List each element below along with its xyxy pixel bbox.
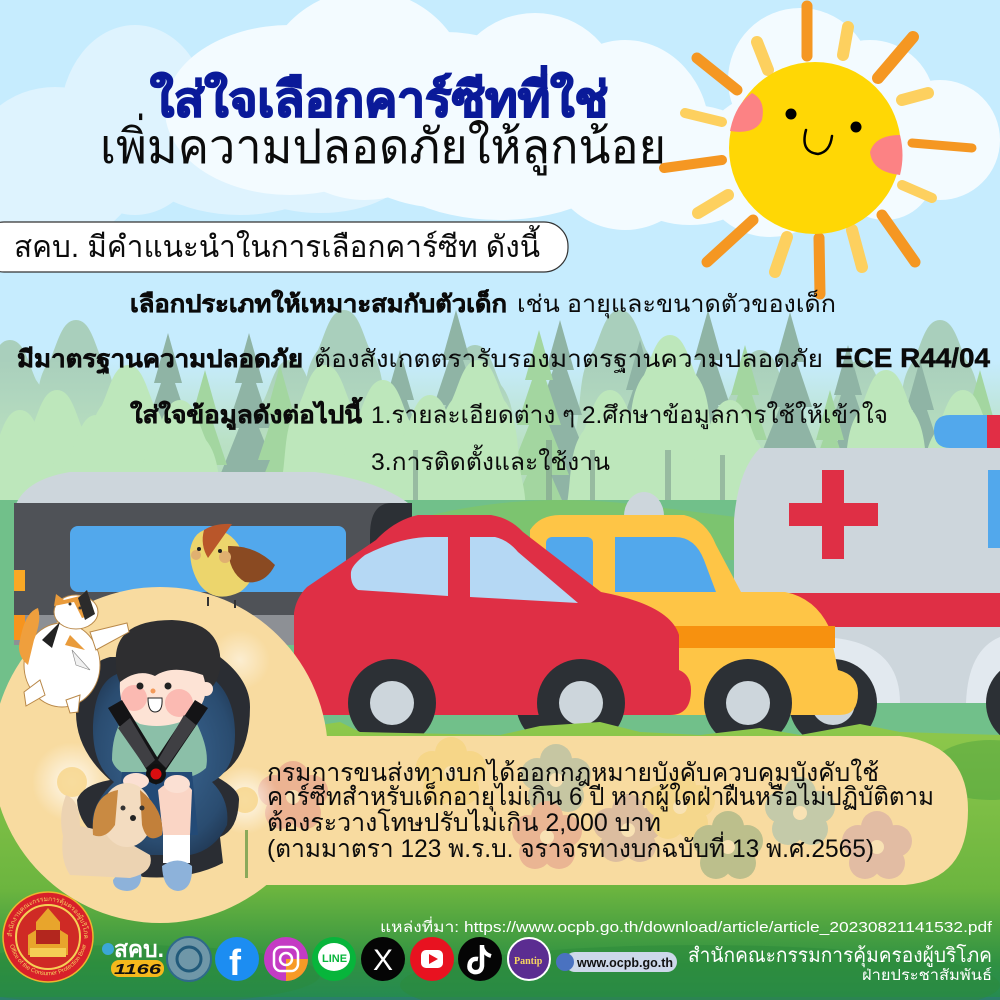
hair xyxy=(116,620,220,690)
icon: LINE xyxy=(312,937,356,981)
title xyxy=(100,65,666,176)
advice 3: 1.รายละเอียดต่าง ๆ 2.ศึกษาข้อมูลการใช้ให้เข้าใจ xyxy=(371,401,888,430)
emblem: office seal: Office of the Consumer Protection Board xyxy=(10,944,86,976)
hotline logo xyxy=(102,936,164,978)
law notice text: คาร์ซีทสำหรับเด็กอายุไม่เกิน 6 ปี หากผู้ใดฝ่าฝืนหรือไม่ปฏิบัติตาม xyxy=(267,781,934,812)
faded flowers xyxy=(258,737,912,879)
sun xyxy=(664,6,972,294)
child in car seat xyxy=(76,620,250,891)
icon: facebook xyxy=(215,937,259,983)
face xyxy=(120,670,213,726)
website pill xyxy=(556,952,677,972)
sun face xyxy=(729,62,901,234)
subheading pill: สคบ. มีคำแนะนำในการเลือกคาร์ซีท ดังนี้ xyxy=(14,225,540,264)
law notice text xyxy=(267,758,934,863)
advice text xyxy=(17,289,990,476)
organisation name: ฝ่ายประชาสัมพันธ์ xyxy=(862,967,992,984)
law notice text: ต้องระวางโทษปรับไม่เกิน 2,000 บาท xyxy=(267,808,661,837)
law notice text: (ตามมาตรา 123 พ.ร.บ. จราจรทางบกฉบับที่ 13 พ.ศ.2565) xyxy=(267,831,874,863)
icon: X xyxy=(361,937,405,981)
icon: LINE: LINE xyxy=(322,953,347,965)
source credit: แหล่งที่มา: https://www.ocpb.go.th/download/article/article_20230821141532.pdf xyxy=(380,916,993,936)
icon: Pantip: Pantip xyxy=(514,956,543,967)
cat xyxy=(19,590,129,713)
organisation name: สำนักคณะกรรมการคุ้มครองผู้บริโภค xyxy=(688,944,992,968)
subheading pill xyxy=(0,222,568,272)
forest background xyxy=(0,310,1000,630)
hotline logo: 1166 xyxy=(114,961,162,978)
car seat xyxy=(76,657,250,877)
icon: Pantip xyxy=(508,938,550,980)
organisation name xyxy=(688,944,992,984)
advice 2: มีมาตรฐานความปลอดภัย xyxy=(17,346,303,375)
advice 1: เลือกประเภทให้เหมาะสมกับตัวเด็ก xyxy=(130,289,507,318)
icon: facebook: f xyxy=(229,942,242,983)
clouds xyxy=(0,0,1000,243)
car windows xyxy=(351,537,578,603)
ground band xyxy=(0,500,1000,740)
leg xyxy=(113,773,192,891)
hotline logo: สคบ. xyxy=(114,936,164,962)
red car xyxy=(294,515,691,747)
dandelions xyxy=(32,630,279,878)
icon: YouTube xyxy=(410,937,454,981)
advice 3 xyxy=(130,396,888,476)
kid panel background xyxy=(0,587,968,923)
bus xyxy=(14,472,412,645)
yellow car xyxy=(516,492,858,747)
emblem: office seal: สำนักงานคณะกรรมการคุ้มครองผู้บริโภค xyxy=(6,897,89,938)
advice 3: ใส่ใจข้อมูลดังต่อไปนี้ xyxy=(130,396,363,430)
dog xyxy=(61,783,162,878)
advice 2: ต้องสังเกตตรารับรองมาตรฐานความปลอดภัย xyxy=(314,346,823,373)
advice 1: เช่น อายุและขนาดตัวของเด็ก xyxy=(517,289,836,319)
grass xyxy=(0,722,1000,1000)
website pill: www.ocpb.go.th xyxy=(576,955,673,970)
icon: TikTok xyxy=(458,937,502,981)
emblem: office seal xyxy=(2,891,94,983)
sun rays yellow xyxy=(685,27,932,272)
law notice text: กรมการขนส่งทางบกได้ออกกฎหมายบังคับควบคุมบังคับใช้ xyxy=(267,758,879,788)
advice 1 xyxy=(130,289,836,319)
advice 2: ECE R44/04 xyxy=(835,343,990,373)
shirt xyxy=(112,716,207,778)
ambulance xyxy=(734,415,1000,747)
sun rays orange xyxy=(664,6,972,294)
icon: OCPB xyxy=(167,937,211,981)
advice 2 xyxy=(17,343,990,375)
roof light xyxy=(624,492,664,540)
shorts xyxy=(115,772,198,835)
red cross xyxy=(789,470,878,559)
bird xyxy=(190,524,275,608)
harness xyxy=(108,700,208,785)
icon: X: X xyxy=(373,944,393,977)
siren xyxy=(934,415,1000,448)
icon: instagram xyxy=(264,937,308,981)
title line 1: ใส่ใจเลือกคาร์ซีทที่ใช่ xyxy=(150,65,608,127)
title line 2: เพิ่มความปลอดภัยให้ลูกน้อย xyxy=(100,113,666,176)
social icons xyxy=(167,937,550,983)
advice 3: 3.การติดตั้งและใช้งาน xyxy=(371,444,610,476)
